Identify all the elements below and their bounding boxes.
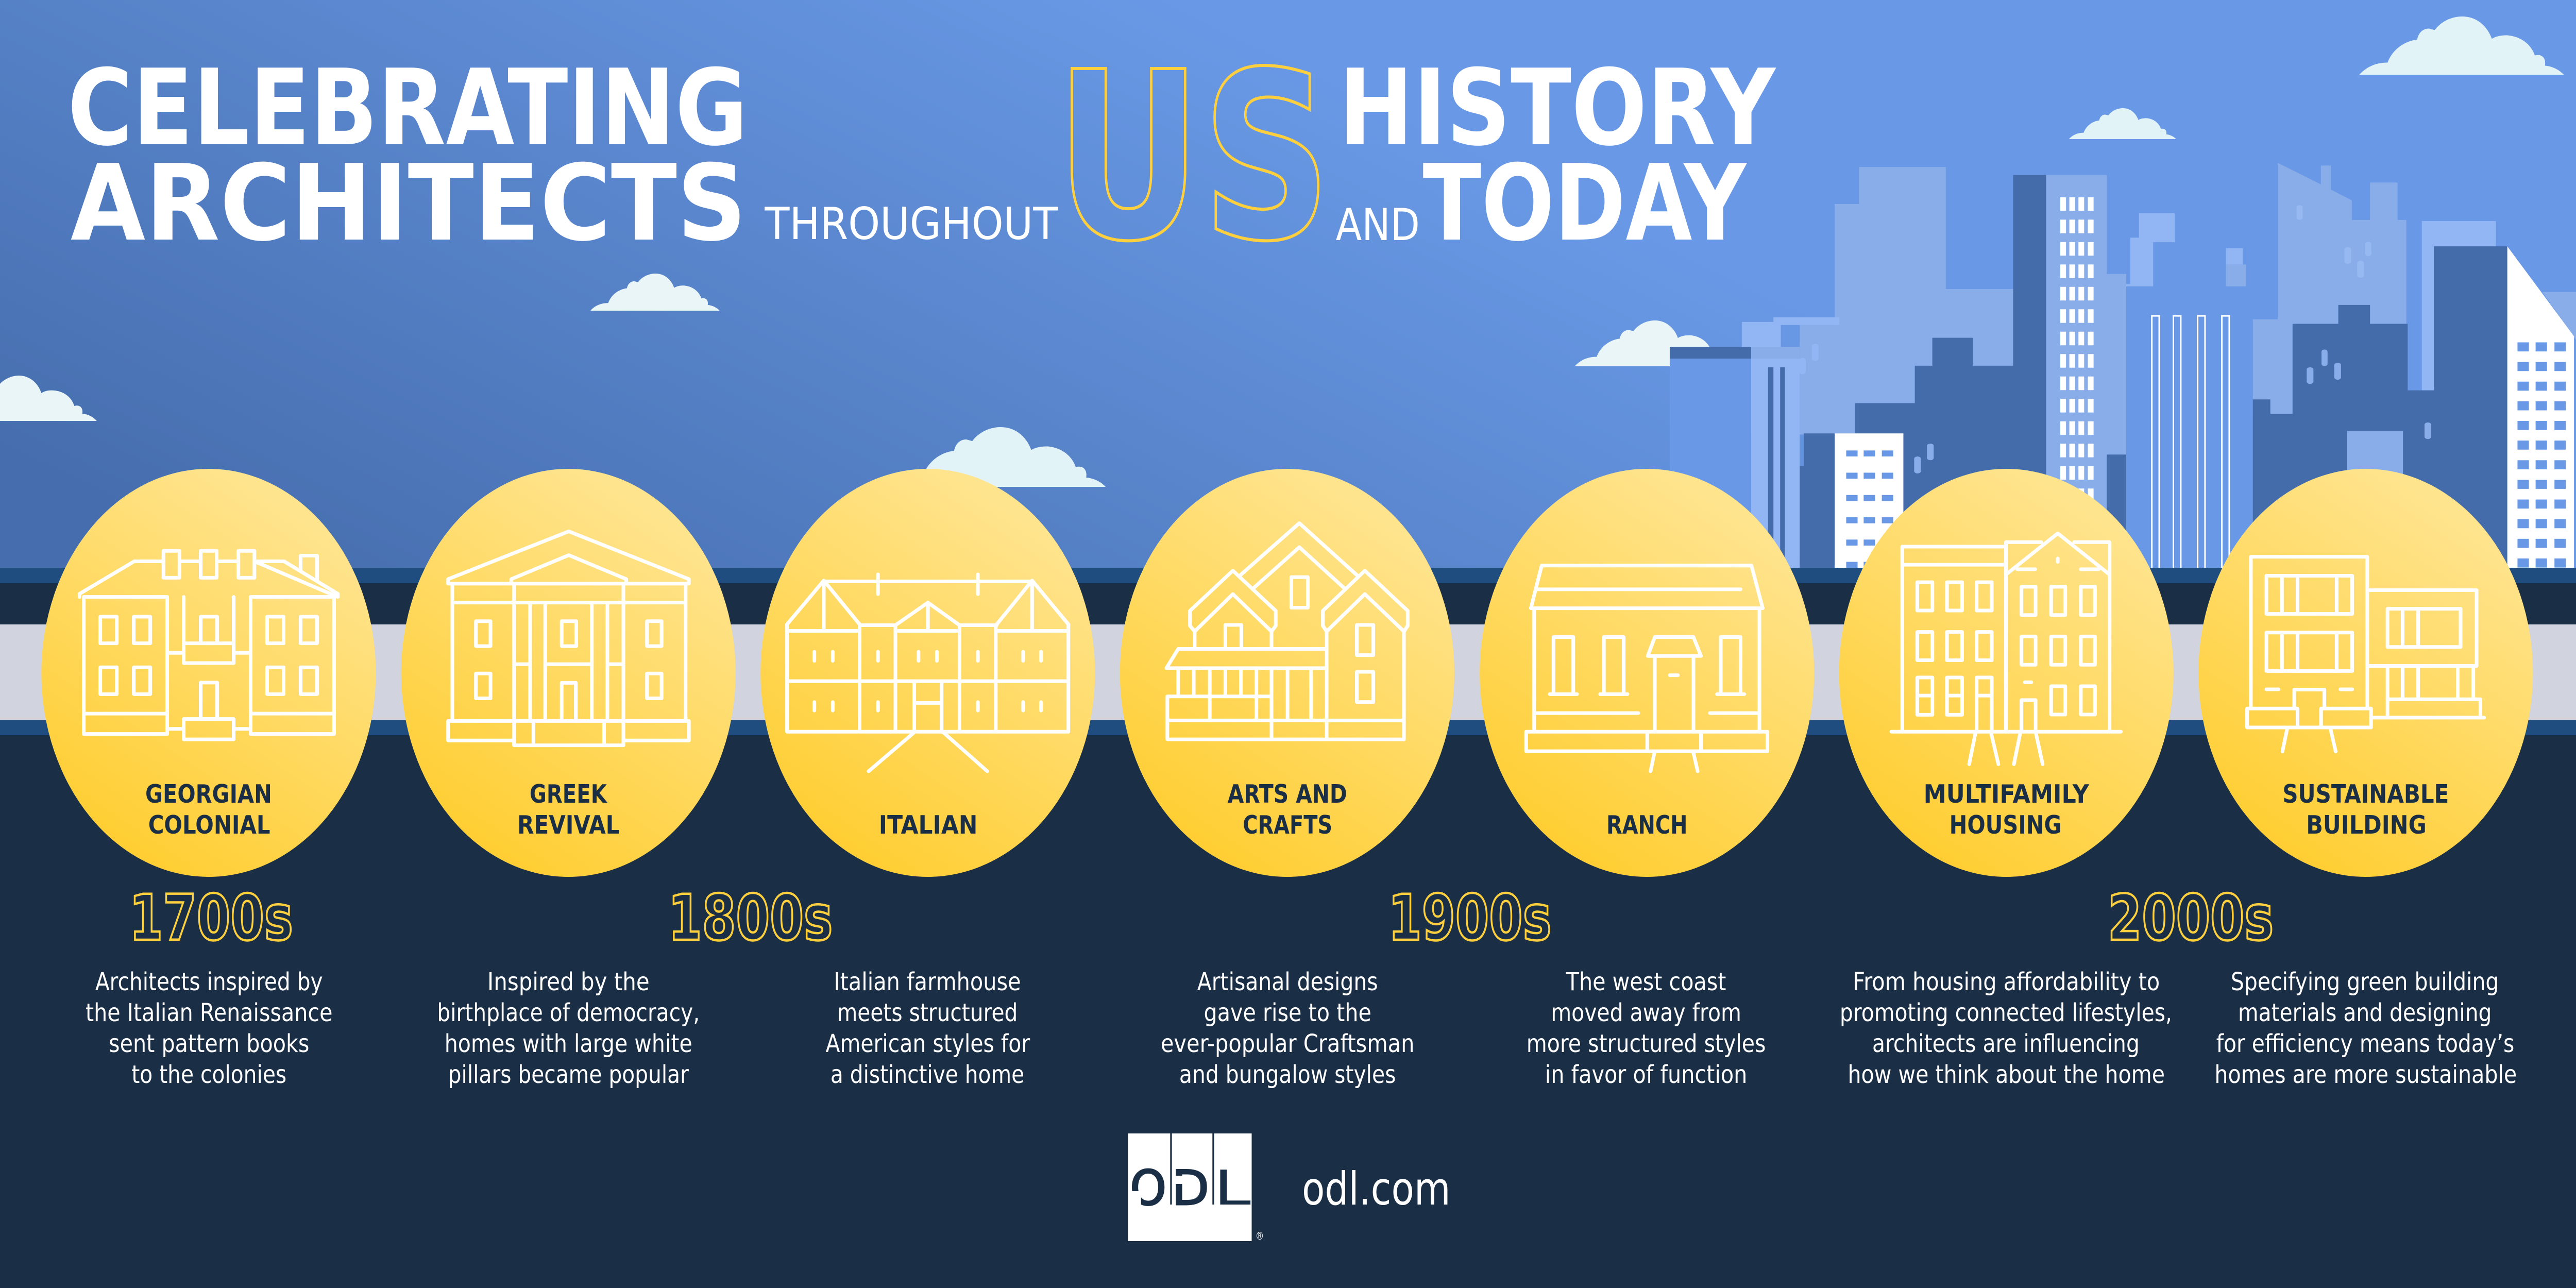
skyline: white wedge building right — [2507, 246, 2574, 568]
circle: Greek Revival — [401, 469, 736, 877]
icon: Multifamily building — [1891, 533, 2121, 764]
text block: Ranch description: more structured styles — [1527, 1029, 1766, 1058]
title word: CELEBRATING: CELEBRATING — [67, 47, 748, 169]
logo: ODL: L — [1214, 1161, 1251, 1216]
circle: Georgian Colonial — [41, 469, 376, 877]
timeline card: Georgian Colonial — [41, 469, 376, 877]
title word: THROUGHOUT: THROUGHOUT — [764, 198, 1058, 250]
skyline: light panel on dark building — [2347, 431, 2403, 568]
circle: Multifamily Housing — [1839, 469, 2174, 877]
label: Italian: ITALIAN — [879, 810, 978, 840]
text block: Arts and Crafts description — [1161, 968, 1414, 1089]
text block: Multifamily Housing description: promoting connected lifestyles, — [1840, 998, 2172, 1027]
skyline: left blue tower — [1670, 347, 1800, 568]
label: Sustainable Building — [2282, 779, 2449, 840]
text block: Italian description: Italian farmhouse — [834, 968, 1021, 996]
text block: Greek Revival description: Inspired by the — [487, 968, 650, 996]
title: CELEBRATING ARCHITECTS THROUGHOUT US HISTORY AND TODAY — [67, 23, 1776, 293]
circle: Arts and Crafts — [1120, 469, 1454, 877]
skyline: pill windows — [1799, 205, 2431, 473]
text block: Multifamily Housing description: From housing affordability to — [1853, 968, 2160, 996]
cloud: left edge — [0, 376, 97, 421]
skyline: window tower — [2013, 175, 2126, 568]
label: Arts and Crafts — [1228, 779, 1347, 840]
label: Multifamily Housing — [1924, 779, 2089, 840]
skyline: pale accent blocks — [1742, 213, 2496, 434]
label: Greek Revival: GREEK — [530, 779, 608, 809]
label: Ranch: RANCH — [1606, 810, 1687, 840]
title word: TODAY: TODAY — [1422, 142, 1747, 264]
title word: ARCHITECTS: ARCHITECTS — [71, 142, 747, 264]
icon: Greek Revival house — [448, 531, 689, 745]
text block: Ranch description: moved away from — [1551, 998, 1741, 1027]
text block: Arts and Crafts description: Artisanal designs — [1197, 968, 1378, 996]
cloud: behind third circle — [894, 427, 1106, 487]
label: Greek Revival: REVIVAL — [517, 810, 619, 840]
text block: Ranch description: in favor of function — [1545, 1060, 1747, 1089]
text block: Arts and Crafts description: and bungalow styles — [1179, 1060, 1396, 1089]
label: Sustainable Building: SUSTAINABLE — [2282, 779, 2449, 809]
label: Georgian Colonial: COLONIAL — [148, 810, 270, 840]
label: Sustainable Building: BUILDING — [2306, 810, 2427, 840]
timeline card: Arts and Crafts — [1120, 469, 1454, 877]
title word: US outline: US — [1055, 23, 1331, 293]
text block: Sustainable Building description — [2214, 968, 2517, 1089]
year: 1700s: 1700s — [129, 882, 293, 955]
text block: Italian description — [825, 968, 1030, 1089]
year: 2000s: 2000s — [2108, 882, 2274, 955]
skyline: center tower with white lines — [2126, 286, 2253, 568]
cloud: top right large — [2360, 16, 2564, 75]
title word: AND: AND — [1336, 199, 1420, 251]
circle: Ranch — [1480, 469, 1814, 877]
circle: Italian — [760, 469, 1095, 877]
label: Georgian Colonial — [145, 779, 272, 840]
title word: HISTORY: HISTORY — [1338, 47, 1776, 169]
label: Arts and Crafts: CRAFTS — [1243, 810, 1332, 840]
logo: ODL: O — [1130, 1161, 1166, 1216]
text block: Italian description: American styles for — [825, 1029, 1030, 1058]
timeline card: Multifamily Housing — [1839, 469, 2174, 877]
text block: Italian description: meets structured — [837, 998, 1018, 1027]
icon: Arts and Crafts house — [1166, 523, 1408, 739]
year: 1800s: 1800s — [668, 882, 833, 955]
text block: Sustainable Building description: for efficiency means today’s — [2216, 1029, 2514, 1058]
logo: ODL: D — [1172, 1161, 1209, 1216]
icon: Italian house — [787, 574, 1069, 771]
text block: Greek Revival description: pillars became popular — [448, 1060, 689, 1089]
skyline: dark buildings — [1800, 246, 2507, 568]
logo: ODL: ® — [1256, 1230, 1264, 1242]
logo: ODL — [1128, 1133, 1264, 1242]
text block: Greek Revival description — [437, 968, 700, 1089]
text block: Arts and Crafts description: gave rise to the — [1204, 998, 1371, 1027]
timeline card: Sustainable Building — [2198, 469, 2533, 877]
text block: Italian description: a distinctive home — [831, 1060, 1024, 1089]
text block: Sustainable Building description: homes are more sustainable — [2214, 1060, 2517, 1089]
timeline card: Italian — [760, 469, 1095, 877]
text block: Georgian Colonial description: to the colonies — [131, 1060, 286, 1089]
skyline: back light buildings — [1800, 163, 2576, 434]
cloud: small above skyline — [2069, 108, 2176, 139]
text block: Georgian Colonial description — [86, 968, 332, 1089]
label: Multifamily Housing: MULTIFAMILY — [1924, 779, 2089, 809]
cloud: under the title — [590, 274, 720, 311]
text block: Greek Revival description: birthplace of democracy, — [437, 998, 700, 1027]
text block: Arts and Crafts description: ever-popular Craftsman — [1161, 1029, 1414, 1058]
icon: Georgian house — [79, 551, 338, 739]
text block: Sustainable Building description: materials and designing — [2238, 998, 2492, 1027]
text block: Georgian Colonial description: sent pattern books — [109, 1029, 309, 1058]
icon: Ranch house — [1526, 566, 1768, 771]
text block: Multifamily Housing description: how we think about the home — [1848, 1060, 2165, 1089]
text block: Ranch description — [1527, 968, 1766, 1089]
skyline: city buildings — [1670, 163, 2576, 568]
text block: Greek Revival description: homes with large white — [445, 1029, 692, 1058]
circle: Sustainable Building — [2198, 469, 2533, 877]
text block: Ranch description: The west coast — [1566, 968, 1726, 996]
label: Georgian Colonial: GEORGIAN — [145, 779, 272, 809]
website: odl.com: odl.com — [1302, 1162, 1451, 1215]
label: Multifamily Housing: HOUSING — [1950, 810, 2062, 840]
icon: Sustainable building — [2247, 557, 2484, 752]
text block: Sustainable Building description: Specifying green building — [2231, 968, 2499, 996]
cloud: behind left skyline tower — [1575, 320, 1734, 366]
text block: Georgian Colonial description: Architects inspired by — [95, 968, 323, 996]
text block: Georgian Colonial description: the Italian Renaissance — [86, 998, 332, 1027]
timeline card: Ranch — [1480, 469, 1814, 877]
text block: Multifamily Housing description — [1840, 968, 2172, 1089]
text block: Multifamily Housing description: architects are influencing — [1872, 1029, 2140, 1058]
year: 1900s: 1900s — [1388, 882, 1551, 955]
skyline: white building left — [1835, 433, 1903, 568]
label: Arts and Crafts: ARTS AND — [1228, 779, 1347, 809]
label: Greek Revival — [517, 779, 619, 840]
timeline card: Greek Revival — [401, 469, 736, 877]
background: blue gradient sky — [0, 0, 2576, 568]
road band: horizontal stripes — [0, 568, 2576, 735]
